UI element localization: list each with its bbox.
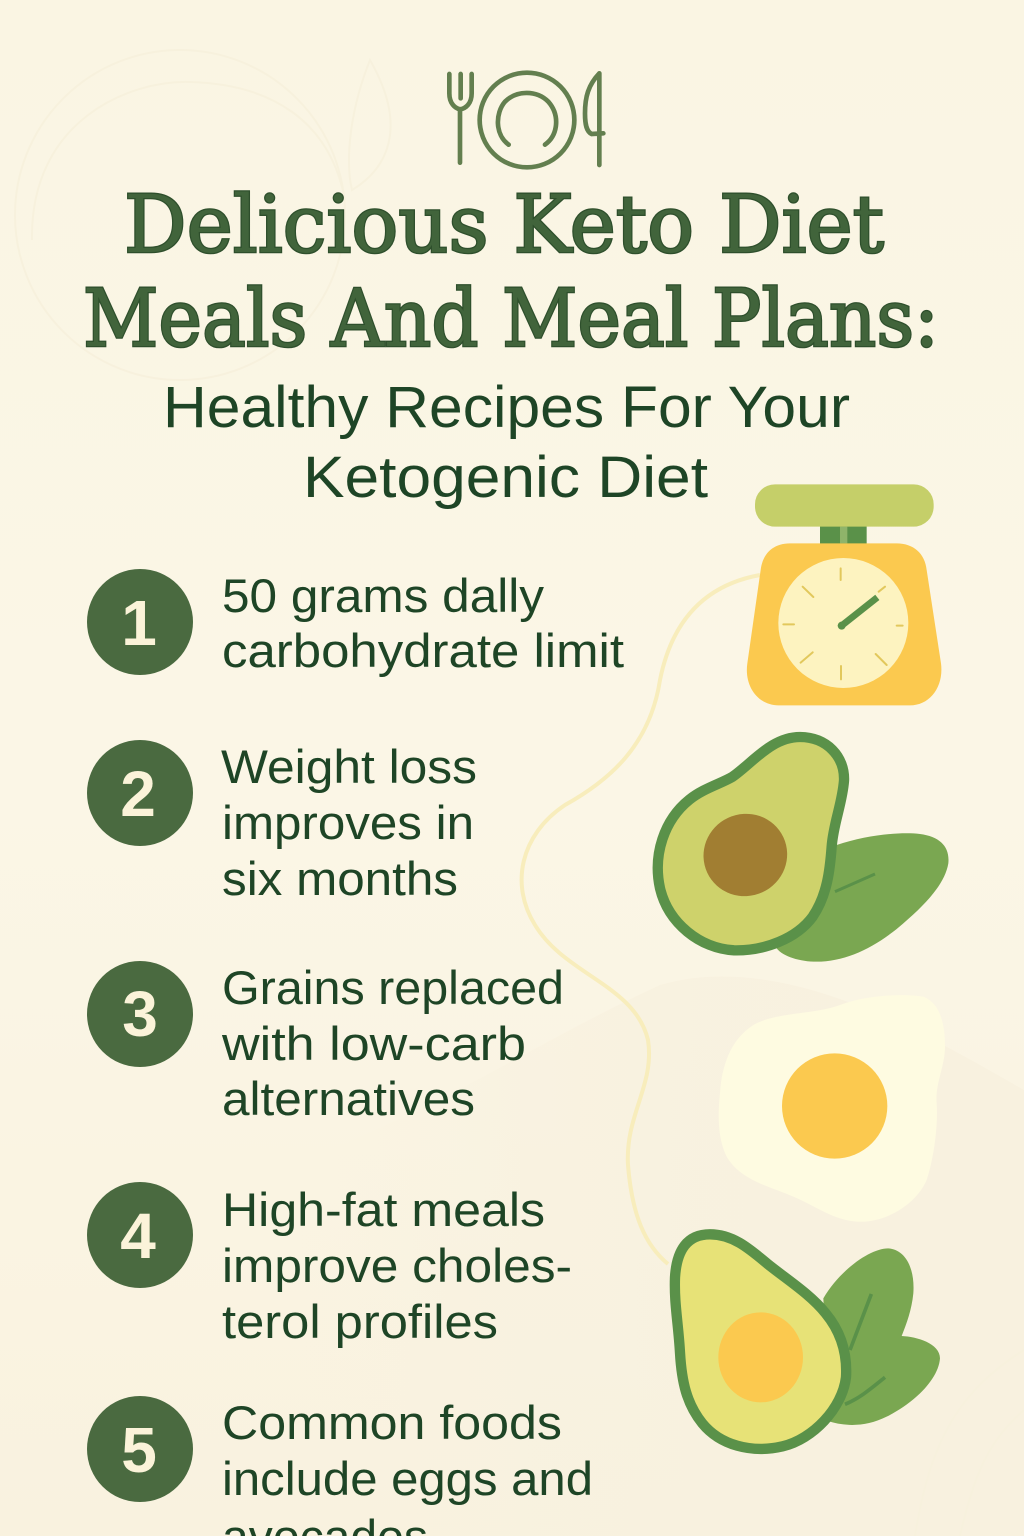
subtitle: Ketogenic Diet — [303, 445, 708, 510]
icon: fried egg — [719, 995, 945, 1222]
list item 5 — [87, 1396, 593, 1536]
list item 2 — [87, 740, 477, 905]
text 4: High-fat meals — [222, 1183, 545, 1236]
text 2: Weight loss — [221, 740, 477, 793]
list item 3 — [87, 961, 564, 1125]
number badge 2 — [87, 740, 193, 846]
connector line — [522, 575, 760, 1264]
list item 4 — [87, 1182, 572, 1348]
text 1 — [222, 569, 624, 677]
text 4: improve choles- — [222, 1239, 572, 1292]
text 2 — [221, 740, 477, 905]
icon: plate with fork and knife — [449, 73, 603, 167]
text 3: with low-carb — [221, 1017, 526, 1070]
number badge 4: 4 — [120, 1200, 156, 1272]
text 5: include eggs and — [222, 1452, 593, 1505]
title — [83, 178, 939, 365]
number badge 4 — [87, 1182, 193, 1288]
number badge 5: 5 — [121, 1414, 157, 1486]
icon: halved avocado with leaf — [658, 737, 949, 962]
list item 1 — [87, 569, 624, 677]
text 3: alternatives — [222, 1072, 475, 1125]
subtitle — [163, 375, 850, 510]
subtitle: Healthy Recipes For Your — [163, 375, 850, 440]
text 1: 50 grams dally — [222, 569, 545, 622]
icon: kitchen scale — [747, 484, 941, 705]
number badge 3: 3 — [122, 978, 158, 1050]
text 5 — [222, 1396, 593, 1536]
text 1: carbohydrate limit — [222, 624, 624, 677]
text 4 — [222, 1183, 572, 1348]
title: Meals And Meal Plans: — [83, 272, 939, 365]
number badge 5 — [87, 1396, 193, 1502]
number badge 3 — [87, 961, 193, 1067]
text 5: Common foods — [222, 1396, 562, 1449]
number badge 2: 2 — [120, 758, 156, 830]
number badge 1: 1 — [121, 587, 157, 659]
text 2: six months — [222, 852, 458, 905]
number badge 1 — [87, 569, 193, 675]
text 3 — [221, 961, 564, 1125]
text 3: Grains replaced — [222, 961, 564, 1014]
text 4: terol profiles — [222, 1295, 498, 1348]
text 2: improves in — [222, 796, 474, 849]
title: Delicious Keto Diet — [124, 178, 884, 271]
icon: avocado with pit and leaves — [675, 1234, 940, 1449]
